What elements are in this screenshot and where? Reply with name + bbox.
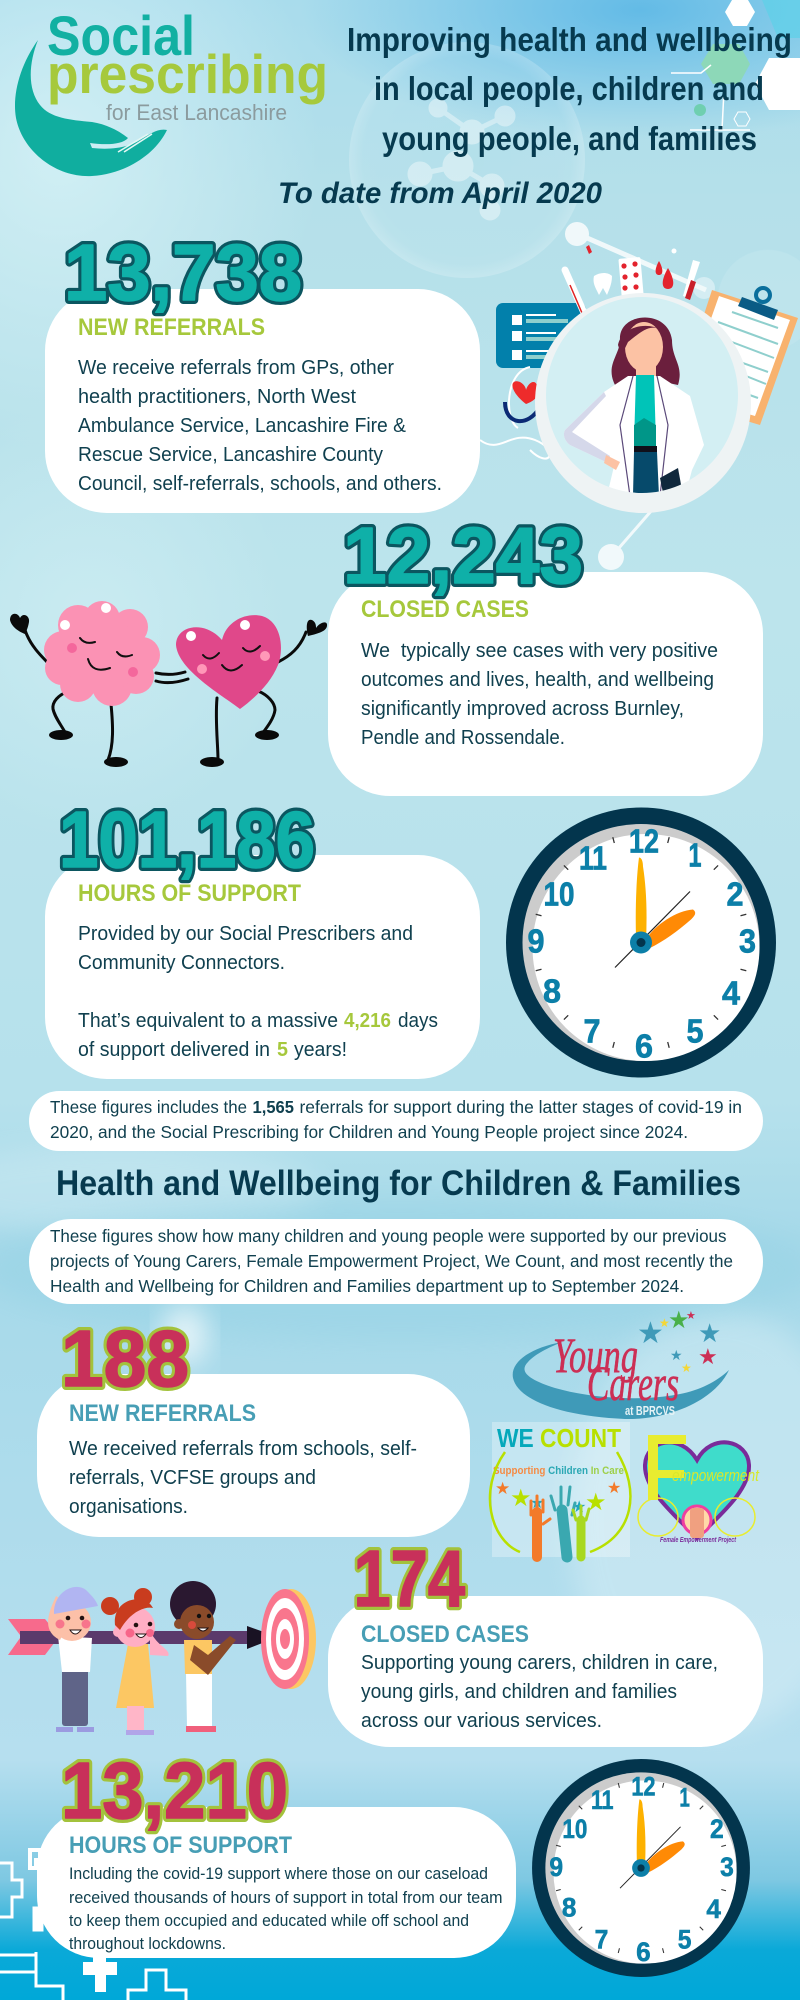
- body text: outcomes and lives, health, and wellbeing: [361, 669, 714, 691]
- body text: Supporting young carers, children in care,: [361, 1652, 718, 1674]
- body text: [69, 1438, 417, 1518]
- icons: raised hands: [531, 1487, 589, 1557]
- body text: days: [398, 1010, 438, 1032]
- panel: closed cases: [328, 511, 763, 796]
- icons: stars: [495, 1479, 621, 1516]
- icon: clock: 12: [629, 822, 659, 860]
- icon: clipboard: [676, 288, 798, 425]
- frame ring: [535, 293, 751, 513]
- logo: [15, 4, 328, 176]
- icon: clock small: 4: [706, 1894, 721, 1924]
- wordmark: WE COUNT: [497, 1423, 621, 1453]
- stat: 101,186: 101,186: [59, 795, 315, 884]
- figure: girl with buns: [101, 1588, 169, 1735]
- heading: hours of support: HOURS OF SUPPORT: [78, 880, 301, 907]
- body text: young girls, and children and families: [361, 1681, 677, 1703]
- panel: hours of support: [45, 795, 480, 1079]
- figure: boy with curly hair: [170, 1581, 236, 1732]
- stat: 188: 188: [61, 1314, 189, 1403]
- wordmark: empowerment: [672, 1466, 760, 1485]
- callout: covid figures note: [29, 1091, 763, 1151]
- figure: boy with hat: [48, 1587, 98, 1732]
- illustration: brain and heart characters: [10, 601, 327, 767]
- stat: 13,738: 13,738: [64, 228, 302, 317]
- stat: 12,243: 12,243: [343, 511, 583, 600]
- icon: clock small: 1: [679, 1783, 690, 1813]
- title: young people, and families: [382, 120, 757, 157]
- icons: stars: ★: [637, 1317, 664, 1350]
- body text: [69, 1865, 502, 1953]
- callout: children and families intro: projects of Young Carers, Female Empowerment Project, We Count, and most recently the: [50, 1251, 733, 1271]
- logo: young carers: [513, 1307, 729, 1419]
- icon: clock small: 12: [631, 1771, 656, 1801]
- icon: clock small: 7: [595, 1925, 608, 1955]
- speech bubbles: [638, 1498, 755, 1536]
- tagline: Supporting Children In Care: [493, 1465, 624, 1477]
- callout: children and families intro: Health and Wellbeing for Children and Families department up to September 2024.: [50, 1276, 684, 1296]
- body text: Rescue Service, Lancashire County: [78, 444, 383, 466]
- body text: received thousands of hours of support in total from our team: [69, 1889, 502, 1907]
- body text: [78, 923, 438, 1061]
- panel: children hours of support: [37, 1746, 516, 1958]
- icon: clock: 1: [688, 836, 702, 874]
- stat: 13,738: 13,738: [64, 228, 302, 317]
- figure: heart: [176, 615, 281, 709]
- icon: clock small: 5: [678, 1925, 692, 1955]
- icon: clock: 10: [544, 876, 574, 912]
- limbs: [25, 630, 306, 760]
- icons: stars: ★: [659, 1316, 670, 1330]
- logo wordmark: prescribing: [47, 43, 328, 105]
- body text: Council, self-referrals, schools, and others.: [78, 473, 442, 495]
- swoosh: [513, 1342, 729, 1419]
- icon: clock small: 9: [549, 1852, 563, 1882]
- callout: covid figures note: These figures includes the: [50, 1097, 247, 1117]
- icon: clock: 5: [686, 1012, 704, 1050]
- arrow: [8, 1619, 278, 1655]
- stat: 13,210: 13,210: [61, 1746, 288, 1835]
- heading: new referrals: NEW REFERRALS: [69, 1400, 256, 1427]
- icons: thermometer, tooth, pills, drops, syringe: [565, 245, 700, 315]
- target: [261, 1589, 316, 1689]
- wordmark: [553, 1327, 679, 1411]
- panel: new referrals: [45, 228, 480, 513]
- icon: clock: 4: [722, 974, 741, 1012]
- stat: 101,186: 101,186: [59, 795, 315, 884]
- body text: That’s equivalent to a massive: [78, 1010, 338, 1032]
- stat: 12,243: 12,243: [343, 511, 583, 600]
- icons: stars: ★: [670, 1347, 683, 1363]
- logo wordmark: for East Lancashire: [106, 100, 287, 125]
- body text: throughout lockdowns.: [69, 1935, 226, 1953]
- icon: clock small: 11: [591, 1785, 614, 1815]
- heading: new referrals: NEW REFERRALS: [78, 314, 265, 341]
- callout: covid figures note: 2020, and the Social Prescribing for Children and Young People project since 2024.: [50, 1122, 688, 1142]
- illustration: children pushing arrow to target: [8, 1581, 316, 1735]
- icons: stars: ★: [530, 1495, 544, 1512]
- body text: We receive referrals from GPs, other: [78, 357, 394, 379]
- callout: covid figures note: referrals for support during the latter stages of covid-19 in: [300, 1097, 742, 1117]
- logo: female empowerment project: [638, 1435, 760, 1544]
- icon: clock small: 3: [720, 1852, 734, 1882]
- wordmark: Carers: [587, 1355, 679, 1411]
- heading: health and wellbeing for children and families: Health and Wellbeing for Children & Families: [56, 1164, 741, 1203]
- stat: 13,210: 13,210: [61, 1746, 288, 1835]
- figure: brain: [44, 601, 160, 706]
- wordmark: Young: [553, 1327, 638, 1383]
- heading: closed cases: CLOSED CASES: [361, 596, 529, 623]
- icon: clock: [506, 808, 776, 1078]
- body text: organisations.: [69, 1496, 188, 1518]
- icons: stars: ★: [686, 1310, 696, 1322]
- icon: clock small: 6: [636, 1937, 651, 1967]
- body text: 5: [277, 1039, 288, 1061]
- callout: children and families intro: [29, 1219, 763, 1304]
- icon: checklist card: [496, 303, 586, 368]
- body text: across our various services.: [361, 1710, 602, 1732]
- callout: covid figures note: 1,565: [252, 1097, 294, 1117]
- panel: children closed cases: [328, 1534, 763, 1747]
- icons: stars: [637, 1307, 721, 1375]
- icons: stars: ★: [585, 1489, 607, 1516]
- icon: clock small: 10: [562, 1814, 587, 1844]
- logo: young carers: at BPRCVS: [625, 1403, 675, 1418]
- illustration: doctor with medical icons: [480, 222, 798, 570]
- body text: years!: [294, 1039, 347, 1061]
- body text: significantly improved across Burnley,: [361, 698, 684, 720]
- caption: Female Empowerment Project: [660, 1535, 736, 1544]
- hands and feet: [10, 614, 327, 767]
- icons: stars: ★: [607, 1480, 621, 1497]
- body text: of support delivered in: [78, 1039, 270, 1061]
- heading: closed cases: CLOSED CASES: [361, 1621, 529, 1648]
- body text: [361, 1652, 718, 1732]
- icons: stars: ★: [572, 1499, 586, 1516]
- logo crescent and hand: [15, 40, 167, 176]
- body text: [78, 357, 442, 495]
- icons: stars: ★: [668, 1307, 690, 1334]
- icon: clock small: [532, 1759, 750, 1977]
- logo: we count: [490, 1422, 630, 1557]
- body text: [361, 640, 718, 749]
- letter F: [648, 1435, 686, 1500]
- icons: stars: ★: [681, 1361, 692, 1375]
- icon: clock: 3: [739, 922, 756, 960]
- icon: clock: 8: [543, 972, 561, 1010]
- faces: [80, 638, 260, 670]
- icons: stars: ★: [495, 1479, 510, 1498]
- icon: clock: 9: [528, 922, 544, 960]
- icon: clock: 6: [635, 1028, 653, 1064]
- body text: health practitioners, North West: [78, 386, 356, 408]
- logo wordmark: Social: [47, 4, 195, 67]
- stat: 174: 174: [354, 1534, 465, 1623]
- body text: to keep them occupied and educated while off school and: [69, 1912, 469, 1930]
- stat: 188: 188: [61, 1314, 189, 1403]
- heart: [645, 1442, 749, 1538]
- title: [347, 21, 792, 157]
- icon: clock: 11: [579, 840, 607, 876]
- stat: 174: 174: [354, 1534, 465, 1623]
- body text: Provided by our Social Prescribers and: [78, 923, 413, 945]
- body text: referrals, VCFSE groups and: [69, 1467, 316, 1489]
- icon: clock small: 2: [710, 1814, 724, 1844]
- icons: stars: ★: [698, 1318, 721, 1348]
- panel: children new referrals: [37, 1314, 470, 1537]
- decorative molecule bubble: [349, 42, 800, 350]
- body text: Ambulance Service, Lancashire Fire &: [78, 415, 407, 437]
- icon: clock: 7: [584, 1012, 600, 1050]
- body text: 4,216: [344, 1010, 391, 1032]
- callout: children and families intro: These figures show how many children and young people were supported by our previous: [50, 1226, 727, 1246]
- body text: Including the covid-19 support where those on our caseload: [69, 1865, 488, 1883]
- logo wordmark: [47, 4, 328, 125]
- icons: stars: ★: [510, 1485, 532, 1512]
- body text: Pendle and Rossendale.: [361, 727, 565, 749]
- heading: hours of support: HOURS OF SUPPORT: [69, 1832, 292, 1859]
- icon: clock: 2: [726, 876, 744, 912]
- figure: doctor: [564, 317, 704, 500]
- molecule connector: [565, 222, 715, 570]
- body text: Community Connectors.: [78, 952, 285, 974]
- arc: [490, 1452, 630, 1552]
- icon: stethoscope and heart: [480, 367, 550, 459]
- icon: clock small: 8: [562, 1892, 576, 1922]
- body text: We received referrals from schools, self-: [69, 1438, 417, 1460]
- icons: stars: ★: [698, 1344, 718, 1369]
- decorative hexagons: [671, 0, 800, 130]
- subtitle: To date from April 2020: [278, 177, 602, 210]
- body text: We typically see cases with very positive: [361, 640, 718, 662]
- decorative medical crosses: [0, 1850, 186, 2000]
